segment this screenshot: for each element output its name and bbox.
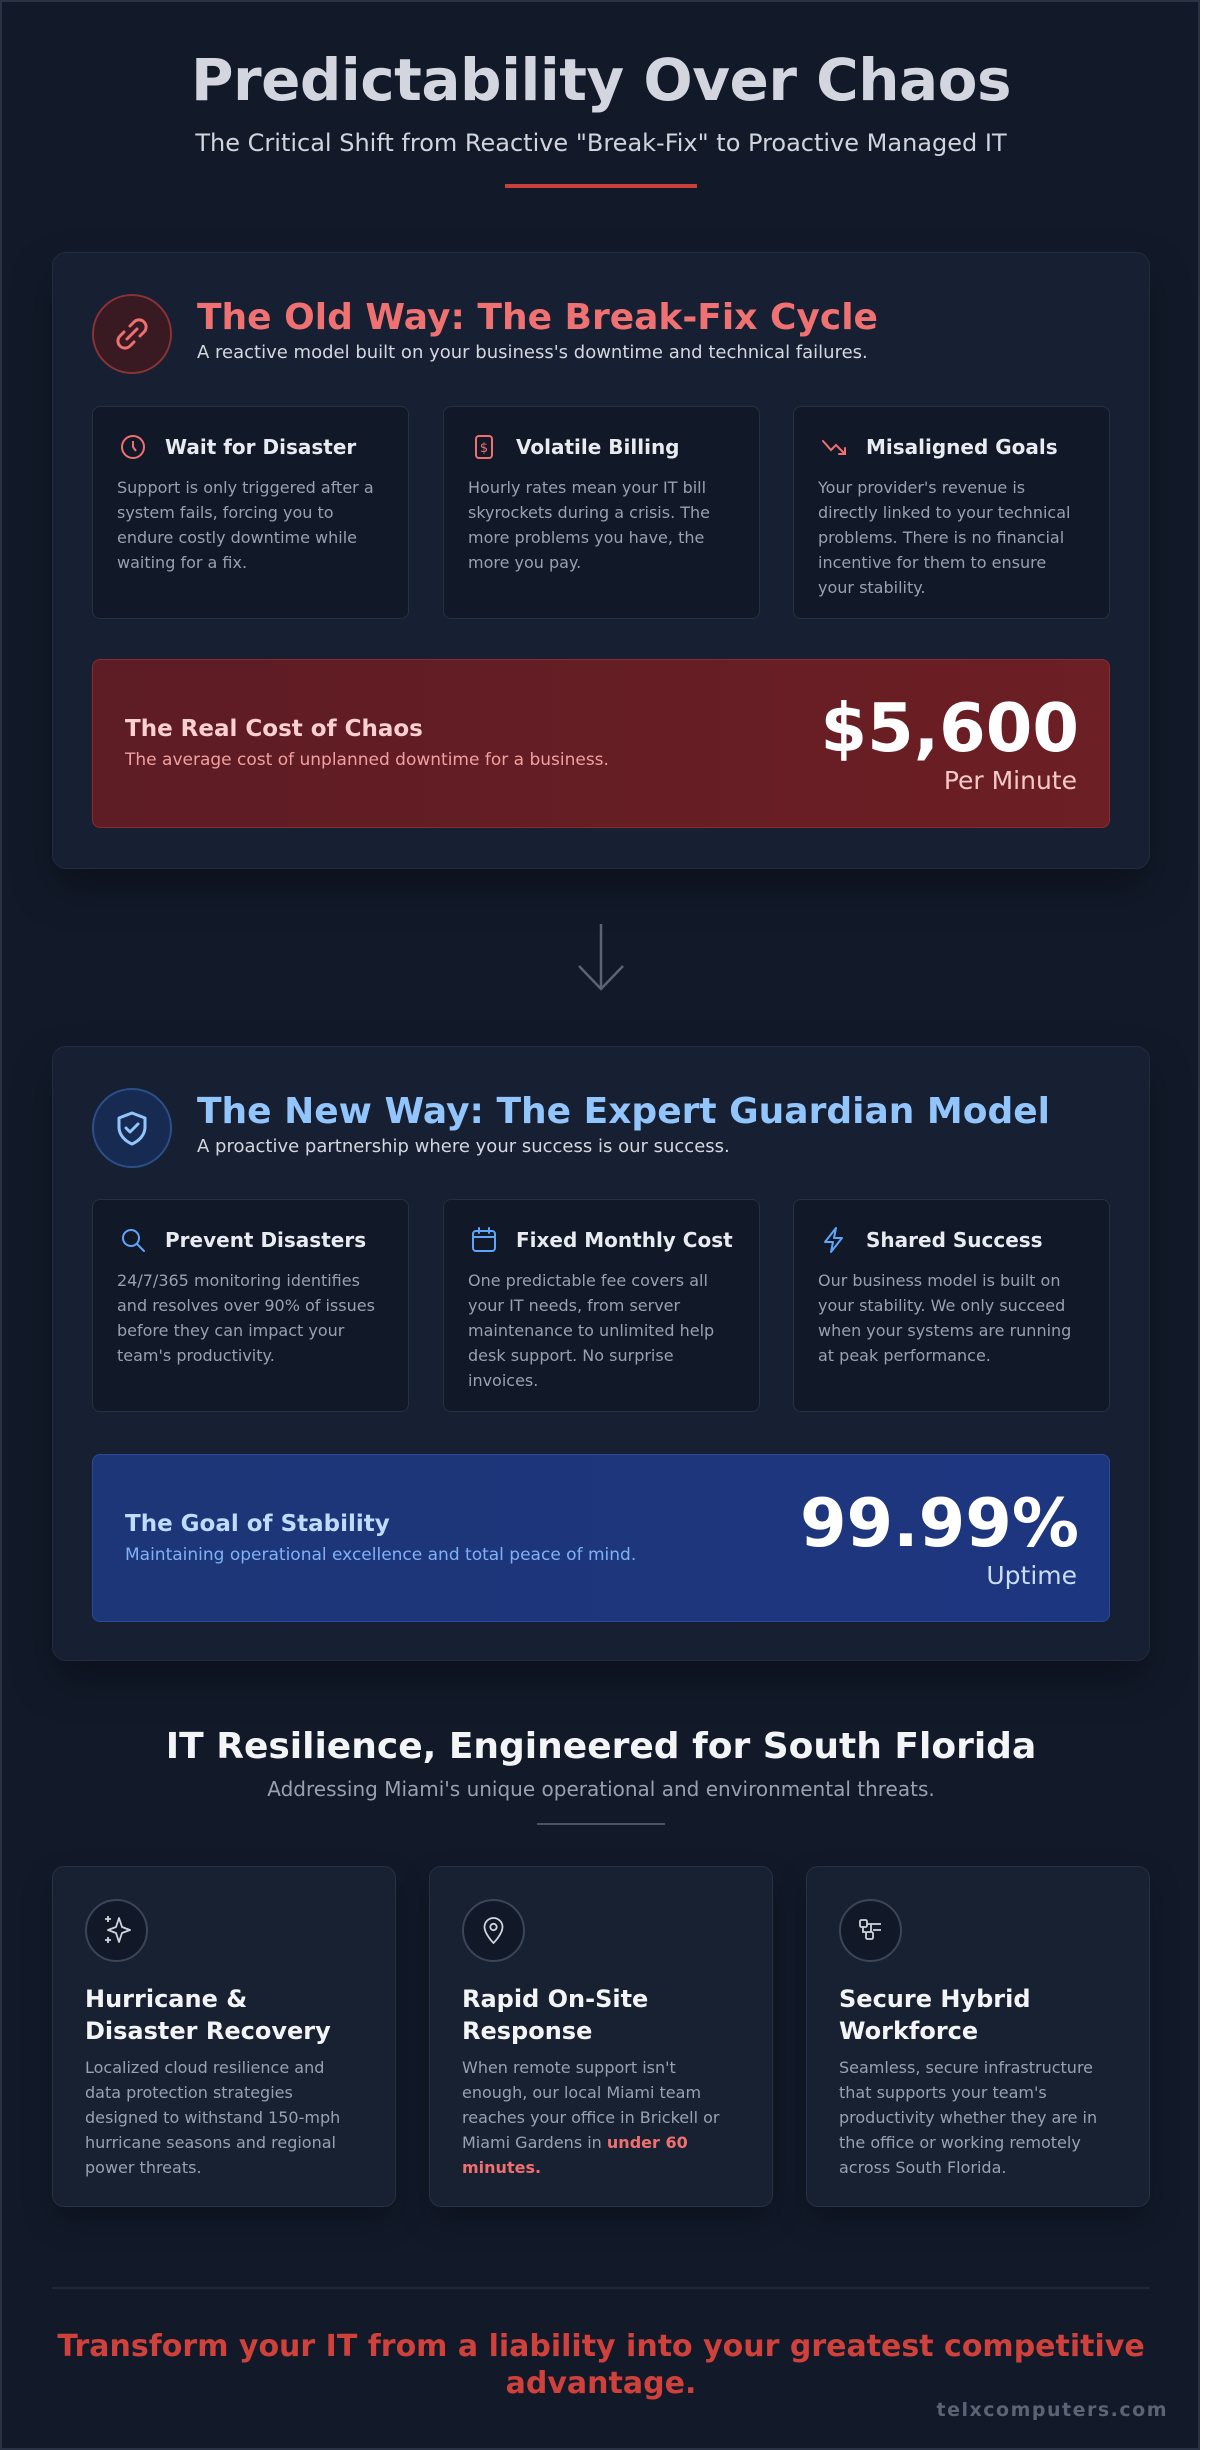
footer: website: telxcomputers.com bbox=[937, 2399, 1168, 2421]
panel: old way bbox=[52, 252, 1150, 869]
arrow bbox=[578, 924, 624, 990]
card: wait bbox=[92, 406, 409, 619]
card: hybrid: Seamless, secure infrastructure that supports your team's productivity whether they are in the office or working remotely across South Florida. bbox=[839, 2058, 1097, 2177]
stat box: cost: Per Minute bbox=[944, 766, 1077, 795]
title: Predictability Over Chaos bbox=[191, 46, 1011, 114]
card: wait: Support is only triggered after a system fails, forcing you to endure costly downtime while waiting for a fix. bbox=[117, 478, 374, 572]
card: shared success: Shared Success bbox=[866, 1228, 1043, 1252]
stat box: cost bbox=[92, 659, 1110, 828]
card: billing: Hourly rates mean your IT bill skyrockets during a crisis. The more problems you have, the more you pay. bbox=[468, 478, 710, 572]
icon: bolt bbox=[824, 1227, 843, 1253]
card: goals bbox=[793, 406, 1110, 619]
icon: trend down bbox=[822, 440, 846, 455]
card: hurricane: Localized cloud resilience and data protection strategies designed to withstand 150-mph hurricane seasons and regional power threats. bbox=[85, 2058, 340, 2177]
subheading: A proactive partnership where your success is our success. bbox=[197, 1136, 730, 1157]
card: shared success: Our business model is built on your stability. We only succeed when your systems are running at peak performance. bbox=[818, 1271, 1071, 1365]
icon: sparkle bbox=[85, 1899, 148, 1962]
card: on-site: Rapid On-Site bbox=[462, 1985, 648, 2013]
stat box: cost: The average cost of unplanned downtime for a business. bbox=[125, 750, 609, 770]
card: wait: Wait for Disaster bbox=[165, 435, 356, 459]
panel: new way bbox=[52, 1046, 1150, 1661]
card: fixed cost bbox=[443, 1199, 760, 1412]
stat box: uptime bbox=[92, 1454, 1110, 1622]
card: prevent bbox=[92, 1199, 409, 1412]
section heading: IT Resilience, Engineered for South Florida bbox=[166, 1726, 1036, 1767]
card: fixed cost: One predictable fee covers all your IT needs, from server maintenance to unlimited help desk support. No surprise invoices. bbox=[468, 1271, 714, 1390]
icon: clock bbox=[121, 435, 145, 459]
card: hurricane: Disaster Recovery bbox=[85, 2017, 331, 2045]
icon: bill: $ bbox=[480, 441, 488, 456]
icon: link bbox=[92, 294, 172, 374]
card: goals: Your provider's revenue is directly linked to your technical problems. There is no financial incentive for them to ensure your stability. bbox=[818, 478, 1070, 597]
card: hurricane: Hurricane & bbox=[85, 1985, 247, 2013]
stat box: uptime: The Goal of Stability bbox=[125, 1511, 390, 1537]
section subheading: Addressing Miami's unique operational and environmental threats. bbox=[267, 1777, 935, 1801]
icon: calendar bbox=[472, 1227, 496, 1252]
card: hybrid bbox=[806, 1866, 1150, 2207]
card: hurricane bbox=[52, 1866, 396, 2207]
stat box: uptime: Maintaining operational excellence and total peace of mind. bbox=[125, 1545, 636, 1565]
card: fixed cost: Fixed Monthly Cost bbox=[516, 1228, 733, 1252]
card: billing bbox=[443, 406, 760, 619]
card: prevent: 24/7/365 monitoring identifies and resolves over 90% of issues before they can impact your team's productivity. bbox=[117, 1271, 375, 1365]
call to action: Transform your IT from a liability into your greatest competitive advantage. bbox=[57, 2329, 1145, 2401]
card: prevent: Prevent Disasters bbox=[165, 1228, 366, 1252]
card: hybrid: Workforce bbox=[839, 2017, 978, 2045]
subheading: A reactive model built on your business's downtime and technical failures. bbox=[197, 342, 868, 363]
card: goals: Misaligned Goals bbox=[866, 435, 1058, 459]
card: on-site: Response bbox=[462, 2017, 592, 2045]
stat box: uptime: 99.99% bbox=[800, 1484, 1079, 1562]
heading: The Old Way: The Break-Fix Cycle bbox=[197, 297, 878, 338]
heading: The New Way: The Expert Guardian Model bbox=[197, 1091, 1050, 1132]
icon: network bbox=[839, 1899, 902, 1962]
stat box: cost: $5,600 bbox=[820, 689, 1079, 767]
card: on-site bbox=[429, 1866, 773, 2207]
icon: pin bbox=[462, 1899, 525, 1962]
icon: bill bbox=[475, 435, 493, 459]
stat box: cost: The Real Cost of Chaos bbox=[125, 716, 423, 742]
card: hybrid: Secure Hybrid bbox=[839, 1985, 1030, 2013]
card: on-site: When remote support isn't enough, our local Miami team reaches your office in Brickell or Miami Gardens in under 60 minutes. bbox=[462, 2058, 719, 2177]
card: shared success bbox=[793, 1199, 1110, 1412]
card: billing: Volatile Billing bbox=[516, 435, 680, 459]
icon: search bbox=[122, 1229, 145, 1252]
stat box: uptime: Uptime bbox=[986, 1561, 1077, 1590]
icon: shield bbox=[92, 1088, 172, 1168]
subtitle: The Critical Shift from Reactive "Break-Fix" to Proactive Managed IT bbox=[195, 129, 1007, 157]
